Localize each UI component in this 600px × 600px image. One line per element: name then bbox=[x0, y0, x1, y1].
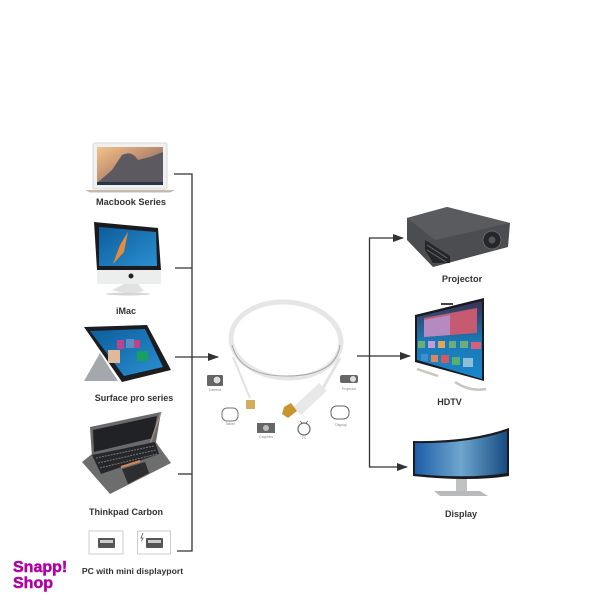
icon: projector device bbox=[407, 207, 510, 267]
icon: mini displayport socket bbox=[89, 531, 123, 554]
icon: tablet bbox=[222, 408, 238, 426]
icon: cable bbox=[228, 298, 344, 418]
label: iMac: iMac bbox=[116, 306, 136, 316]
logo: Snapp Shop bbox=[13, 559, 67, 592]
icon: display bbox=[331, 406, 349, 427]
icon: Thinkpad laptop bbox=[82, 412, 171, 494]
icon: graphics: Graphics bbox=[259, 435, 273, 439]
label: Macbook Series: Macbook Series bbox=[96, 197, 166, 207]
arrow: to HDTV bbox=[357, 355, 410, 357]
icon: display monitor bbox=[413, 428, 509, 496]
arrow: to projector bbox=[369, 237, 403, 239]
icon: tablet: Tablet bbox=[225, 422, 235, 426]
icon: thunderbolt socket bbox=[138, 531, 170, 554]
label: HDTV: HDTV bbox=[437, 397, 462, 407]
icon: Surface Pro tablet bbox=[84, 325, 171, 382]
icon: camera: Camera bbox=[209, 388, 221, 392]
arrow: sources to cable bbox=[175, 356, 218, 358]
connector: sources bracket bbox=[174, 174, 192, 551]
label: Display: Display bbox=[445, 509, 477, 519]
connector: outputs line bbox=[368, 238, 370, 467]
icon: camera bbox=[207, 375, 223, 392]
logo: Snapp Shop: Snapp! bbox=[13, 559, 67, 576]
icon: Macbook laptop bbox=[85, 143, 175, 192]
label: Surface pro series: Surface pro series bbox=[95, 393, 173, 403]
icon: projector bbox=[340, 375, 358, 391]
icon: graphics bbox=[257, 423, 275, 439]
label: Thinkpad Carbon: Thinkpad Carbon bbox=[89, 507, 163, 517]
icon: projector: Projector bbox=[342, 387, 357, 391]
icon: TV bbox=[298, 421, 310, 440]
label: Projector: Projector bbox=[442, 274, 483, 284]
icon: iMac bbox=[94, 222, 161, 296]
arrow: to display bbox=[369, 466, 407, 468]
icon: HDTV bbox=[415, 298, 486, 390]
icon: TV: TV bbox=[302, 436, 307, 440]
logo: Snapp Shop: Shop bbox=[13, 575, 53, 592]
label: PC with mini displayport: PC with mini displayport bbox=[82, 566, 183, 576]
icon: display: Display bbox=[335, 423, 347, 427]
